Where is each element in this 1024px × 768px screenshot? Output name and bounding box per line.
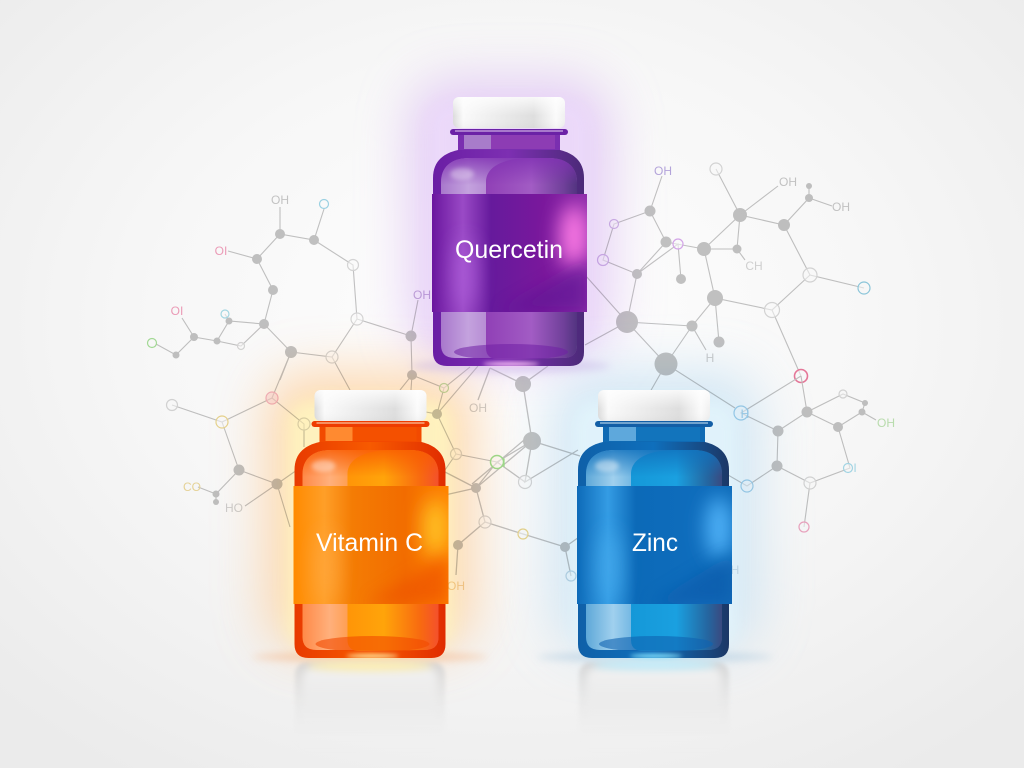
reflection: vitamin C bottle [295,662,445,748]
molecule: upper right: OH [779,175,797,189]
molecule: upper right: OH [654,164,672,178]
bottle: Quercetin [432,97,588,366]
floor shadow: blue [537,653,773,670]
neck [320,426,422,444]
bottle: Zinc [577,390,732,658]
label text: Vitamin C [316,529,423,557]
molecule: upper left [148,193,431,390]
label text: Quercetin [455,236,563,264]
glow: purple [410,80,610,360]
molecule: upper right: H [706,351,714,365]
label [432,194,588,312]
molecule: lower left: CO [183,480,201,494]
neck [603,426,705,444]
molecule: upper left: OI [215,244,227,258]
molecule: upper right [585,163,870,408]
rim [595,421,713,427]
molecule: upper right: CH [745,259,763,273]
molecule: lower right: H [731,563,739,577]
molecule: lower left [166,352,497,527]
molecule: centre: I [502,456,506,470]
molecule: upper left: OI [171,304,183,318]
glow: blue [552,372,758,650]
molecule: centre: OH [469,401,487,415]
molecule: lower right: I [853,461,857,475]
cap [453,97,565,128]
reflection: zinc bottle [579,662,729,748]
molecule: upper left: OH [413,288,431,302]
rim [312,421,430,427]
molecule: lower right [728,376,895,577]
label [294,486,448,604]
glass body [433,150,584,366]
molecule: upper right: OH [832,200,850,214]
molecule: centre: OH [447,579,465,593]
neck [458,134,560,152]
floor shadow: orange [252,653,488,671]
molecule: lower right: OH [877,416,895,430]
bottle: Vitamin C [294,390,448,658]
glass body [294,442,446,658]
cap [598,390,710,421]
molecule: centre [445,366,582,593]
glass body [578,442,729,658]
floor shadow: purple [410,359,610,373]
cap [314,390,426,421]
label [577,486,732,604]
molecule: lower right: H [741,407,749,421]
glow: orange [266,372,474,650]
molecule: upper left: OH [271,193,289,207]
rim [450,129,568,135]
molecule: lower left: HO [225,501,243,515]
label text: Zinc [632,529,678,557]
